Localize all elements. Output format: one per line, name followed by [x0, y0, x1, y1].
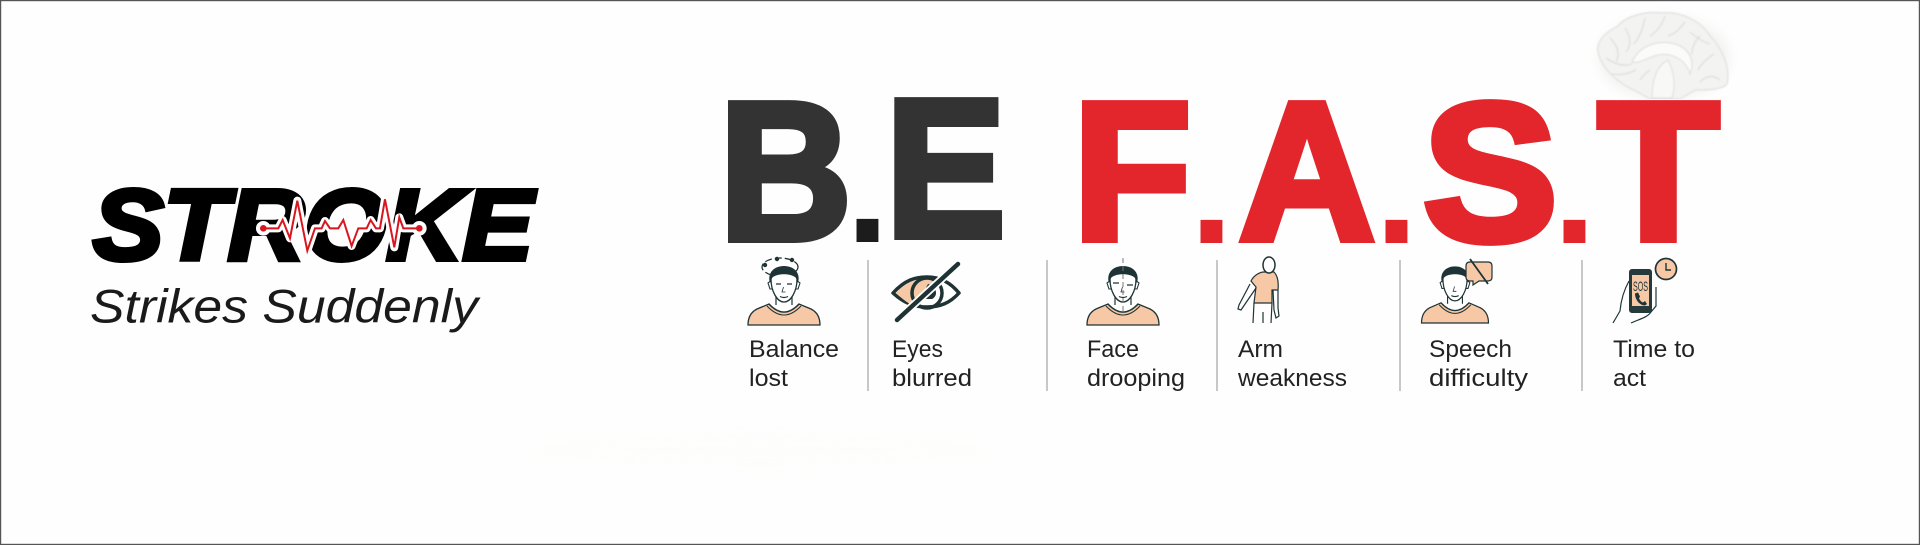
title: B.E — [720, 58, 1005, 281]
label: blurred — [892, 365, 972, 392]
letter T: T — [1598, 62, 1719, 281]
icon: crossed eye — [893, 264, 959, 320]
letter S: S — [1423, 64, 1558, 282]
icon: drooping face person — [1087, 258, 1159, 325]
dot: . — [1553, 103, 1596, 276]
label: Eyes — [892, 336, 943, 363]
panel: balance — [748, 257, 839, 392]
panel: face — [1087, 258, 1185, 392]
dot: . — [1375, 103, 1418, 276]
label: Speech — [1429, 336, 1512, 363]
dot: . — [846, 102, 889, 275]
label: Face — [1087, 336, 1139, 363]
label: lost — [749, 365, 788, 392]
letter A: A — [1239, 61, 1375, 281]
panel: arm — [1237, 257, 1347, 392]
icon: brain — [1598, 13, 1728, 99]
label: drooping — [1087, 365, 1185, 392]
dot: . — [1190, 103, 1233, 276]
label: Time to — [1613, 336, 1695, 363]
icon: dizzy person — [748, 257, 820, 325]
icon: standing figure with weak arm — [1238, 257, 1279, 323]
icon: ecg heartbeat line — [256, 199, 427, 251]
label: act — [1613, 365, 1646, 392]
panel: eyes — [892, 264, 972, 392]
label: weakness — [1237, 365, 1347, 392]
icon: phone with clock: SOS — [1633, 278, 1648, 294]
stroke logo — [93, 170, 536, 282]
letter E: E — [886, 58, 1005, 278]
letter F: F — [1073, 63, 1191, 281]
label: Balance — [749, 336, 839, 363]
panel: time — [1613, 258, 1695, 392]
label: difficulty — [1429, 365, 1528, 392]
subtitle: Strikes Suddenly — [90, 280, 481, 332]
column dividers — [868, 260, 1582, 391]
faint smudge — [520, 430, 1000, 470]
title: F.A.S.T — [1073, 61, 1719, 282]
label: Arm — [1238, 336, 1283, 363]
panel: speech — [1422, 259, 1528, 392]
letter B: B — [720, 62, 852, 281]
icon: person with crossed speech bubble — [1422, 259, 1492, 323]
logo word: STROKE — [93, 170, 536, 282]
